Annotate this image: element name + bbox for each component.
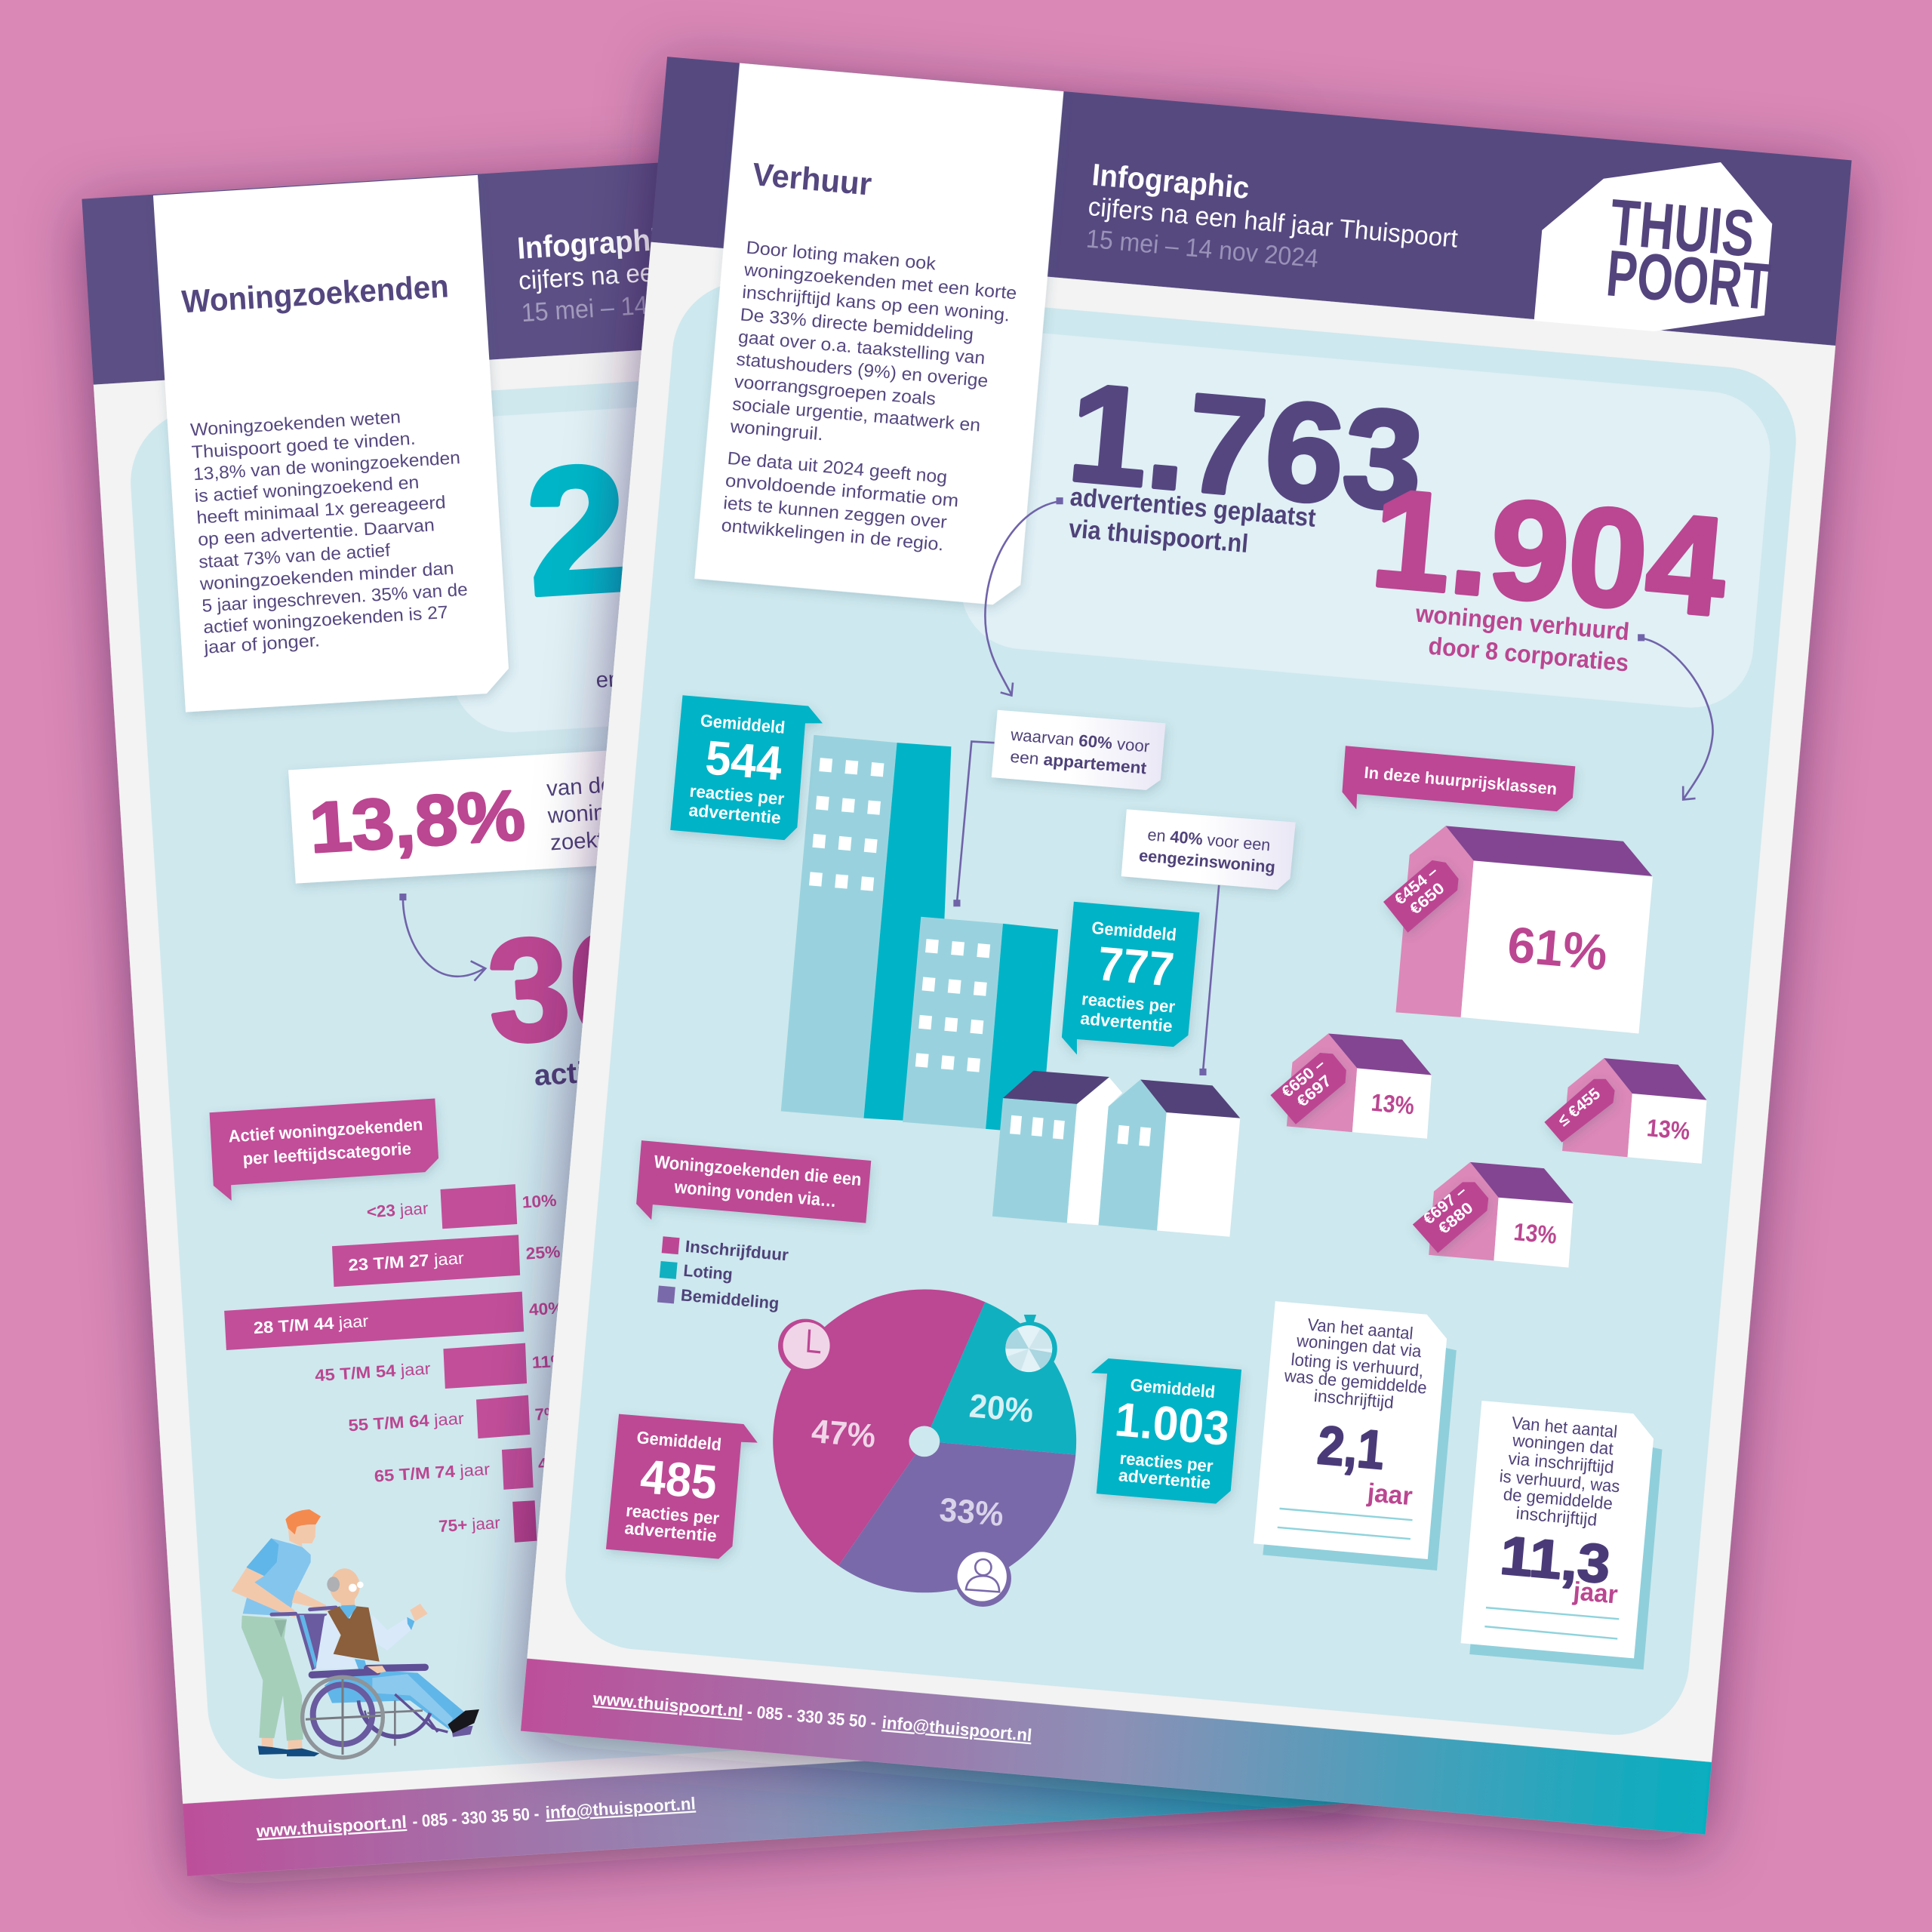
callout 1.003: Gemiddeld <box>1130 1375 1216 1401</box>
text block Verhuur: sociale urgentie, maatwerk en <box>731 395 981 436</box>
header text: cijfers na een half jaar Thuispoort <box>1087 192 1460 254</box>
bar chart age categories: <23 jaar <box>366 1198 429 1221</box>
callout 485 <box>606 1414 758 1559</box>
bar chart age categories: 28 T/M 44 jaar <box>253 1312 369 1337</box>
document inschrijftijd: Van het aantal <box>1511 1413 1618 1441</box>
callout 485: Gemiddeld <box>636 1427 722 1454</box>
text block Verhuur: statushouders (9%) en overige <box>735 350 989 392</box>
panel: front page Verhuur <box>521 57 1852 1835</box>
arrow from advertenties to buildings <box>985 498 1062 696</box>
heading Verhuur: Verhuur <box>751 156 873 202</box>
ribbon huurprijsklassen: In deze huurprijsklassen <box>1364 763 1558 798</box>
back footer text: - 085 - 330 35 50 - <box>412 1804 540 1831</box>
back header text <box>516 221 890 328</box>
connector eengezinswoning <box>1201 885 1219 1075</box>
pie chart: 20% <box>968 1387 1035 1430</box>
back header text: 15 mei – 14 nov 2024 <box>521 285 755 328</box>
text block Verhuur: woningzoekenden met een korte <box>743 260 1017 303</box>
callout 485: reacties per <box>625 1500 720 1528</box>
text block Verhuur: ontwikkelingen in de regio. <box>721 516 944 555</box>
callout 777: reacties per <box>1081 989 1176 1017</box>
big number teal: 2 <box>521 426 633 633</box>
big number 1.763: 1.763 <box>1063 355 1429 540</box>
building medium <box>903 917 1058 1134</box>
text block Woningzoekenden: is actief woningzoekend en <box>194 473 420 506</box>
text block Woningzoekenden: 5 jaar ingeschreven. 35% van de <box>202 580 468 617</box>
text block Verhuur: iets te kunnen zeggen over <box>722 494 948 533</box>
document inschrijftijd: 11,3 <box>1498 1525 1613 1595</box>
callout 1.003: 1.003 <box>1112 1392 1232 1456</box>
back footer text <box>255 1793 696 1841</box>
footer text: info@thuispoort.nl <box>881 1712 1032 1745</box>
logo Thuispoort: THUIS <box>1607 186 1757 271</box>
house 61%: €650 <box>1407 879 1448 918</box>
bar chart age categories: 55 T/M 64 jaar <box>348 1409 465 1435</box>
header text <box>1085 157 1460 273</box>
callout 13,8%: woning <box>546 799 619 829</box>
document inschrijftijd: via inschrijftijd <box>1507 1448 1615 1477</box>
footer text: www.thuispoort.nl <box>592 1688 744 1721</box>
callout 777 <box>1062 902 1199 1055</box>
bar chart age categories: 4% <box>537 1454 563 1474</box>
building large <box>781 735 951 1122</box>
icon: timer <box>1003 1315 1057 1376</box>
house 13% bottom: €880 <box>1435 1199 1477 1238</box>
ribbon huurprijsklassen <box>1342 746 1575 811</box>
pie chart: 33% <box>938 1491 1005 1534</box>
bar chart age categories: 75+ jaar <box>438 1513 500 1536</box>
back footer text: info@thuispoort.nl <box>545 1793 696 1823</box>
callout 13,8%: van de <box>546 772 614 801</box>
callout 544: 544 <box>703 731 785 791</box>
text block Woningzoekenden: staat 73% van de actief <box>198 541 391 573</box>
back header text: Infographic <box>516 221 675 266</box>
label advertenties <box>1068 483 1317 558</box>
document loting: was de gemiddelde <box>1283 1365 1428 1398</box>
back footer text: www.thuispoort.nl <box>255 1812 408 1841</box>
text block Woningzoekenden <box>189 408 468 658</box>
ribbon woningzoekenden die een woning vonden <box>636 1140 871 1223</box>
house 13% left <box>1270 1033 1432 1139</box>
icon: clock <box>778 1319 832 1373</box>
legend <box>657 1236 789 1313</box>
legend: Loting <box>683 1261 734 1284</box>
back header text: cijfers na een half jaar Thuispoort <box>518 244 890 296</box>
house 13% right: 13% <box>1646 1113 1691 1145</box>
back page sheet <box>82 125 1374 1876</box>
document inschrijftijd: jaar <box>1571 1577 1619 1610</box>
label woningen verhuurd: door 8 corporaties <box>1427 632 1630 677</box>
callout 777: Gemiddeld <box>1091 918 1177 945</box>
pie chart <box>773 1289 1076 1592</box>
text block Verhuur: De data uit 2024 geeft nog <box>727 449 948 488</box>
callout 1.003: advertentie <box>1118 1465 1211 1493</box>
label advertenties: advertenties geplaatst <box>1069 483 1317 533</box>
header text: Infographic <box>1091 157 1251 205</box>
text: actief: actief <box>533 1055 613 1092</box>
logo Thuispoort: POORT <box>1604 237 1774 324</box>
bar chart age categories <box>224 1184 568 1543</box>
big number 1.904: 1.904 <box>1366 460 1732 646</box>
ribbon age categories <box>210 1099 438 1201</box>
arrow from woningen to houses <box>1638 635 1713 800</box>
document inschrijftijd: inschrijftijd <box>1515 1503 1598 1530</box>
panel: back page Woningzoekenden <box>82 125 1374 1876</box>
bar chart age categories: 23 T/M 27 jaar <box>348 1248 465 1275</box>
house 61%: 61% <box>1506 916 1610 981</box>
callout eengezinswoning <box>1121 809 1296 890</box>
ribbon age categories: per leeftijdscategorie <box>242 1138 412 1168</box>
callout eengezinswoning: en 40% voor een <box>1147 825 1271 854</box>
house 13% right: ≤ €455 <box>1555 1084 1604 1130</box>
heading Woningzoekenden: Woningzoekenden <box>180 268 450 319</box>
text block Verhuur: De 33% directe bemiddeling <box>740 305 974 345</box>
text block Verhuur: gaat over o.a. taakstelling van <box>737 328 986 368</box>
callout appartement: waarvan 60% voor <box>1009 725 1150 756</box>
callout 485: 485 <box>638 1450 719 1509</box>
bar chart age categories: 40% <box>528 1298 565 1319</box>
callout eengezinswoning: eengezinswoning <box>1138 846 1276 877</box>
house 13% left: €650 – <box>1278 1055 1328 1101</box>
text block Woningzoekenden: 13,8% van de woningzoekenden <box>192 448 461 485</box>
text block Verhuur: woningruil. <box>729 417 824 445</box>
legend: Inschrijfduur <box>685 1237 789 1265</box>
callout 485: advertentie <box>624 1518 718 1546</box>
house 61%: €454 – <box>1392 863 1441 909</box>
text block Verhuur: inschrijftijd kans op een woning. <box>741 283 1011 326</box>
text: en: en <box>595 666 621 693</box>
callout 13,8%: zoekt <box>549 827 604 856</box>
callout 13,8%: 13,8% <box>307 775 528 869</box>
text block Woningzoekenden: Thuispoort goed te vinden. <box>191 429 416 463</box>
house 13% bottom: €697 – <box>1420 1183 1470 1228</box>
arrow to 30 <box>401 894 485 981</box>
document inschrijftijd <box>1461 1401 1662 1669</box>
document loting <box>1254 1301 1457 1571</box>
document loting: 2,1 <box>1315 1415 1387 1481</box>
big number 30: 30 <box>484 901 655 1073</box>
callout appartement <box>992 710 1165 790</box>
legend: Bemiddeling <box>680 1285 780 1313</box>
label woningen verhuurd: woningen verhuurd <box>1414 599 1631 645</box>
bar chart age categories: 10% <box>521 1191 558 1212</box>
document loting: jaar <box>1365 1478 1414 1511</box>
document inschrijftijd: de gemiddelde <box>1503 1484 1614 1513</box>
white panel Woningzoekenden <box>153 175 509 712</box>
callout appartement: een appartement <box>1010 747 1148 777</box>
callout 13,8% <box>288 746 697 884</box>
connector appartement <box>955 742 995 906</box>
header text: 15 mei – 14 nov 2024 <box>1085 224 1319 273</box>
bar chart age categories: 65 T/M 74 jaar <box>374 1460 491 1486</box>
text block Woningzoekenden: heeft minimaal 1x gereageerd <box>196 493 446 528</box>
callout 544 <box>670 695 823 840</box>
house 61% <box>1383 826 1653 1033</box>
house 13% right <box>1544 1058 1707 1164</box>
callout 544: Gemiddeld <box>700 710 786 737</box>
ribbon woningzoekenden die een woning vonden: woning vonden via… <box>673 1177 837 1211</box>
houses eengezinswoning <box>992 1071 1240 1237</box>
text block Verhuur: voorrangsgroepen zoals <box>734 372 937 410</box>
ribbon age categories: Actief woningzoekenden <box>228 1114 423 1146</box>
house 13% bottom <box>1413 1162 1574 1268</box>
front page sheet <box>521 57 1852 1835</box>
document inschrijftijd: woningen dat <box>1511 1430 1614 1459</box>
footer text: - 085 - 330 35 50 - <box>746 1701 877 1732</box>
document inschrijftijd: is verhuurd, was <box>1499 1466 1621 1496</box>
bar chart age categories: 7% <box>534 1404 560 1424</box>
callout 777: advertentie <box>1079 1008 1174 1035</box>
document loting: woningen dat via <box>1295 1331 1423 1361</box>
house 13% bottom: 13% <box>1512 1217 1558 1249</box>
document loting: Van het aantal <box>1306 1315 1414 1343</box>
pie chart: 47% <box>810 1413 877 1455</box>
label woningen verhuurd <box>1414 599 1631 677</box>
callout 544: advertentie <box>688 800 782 827</box>
house 13% left: €697 <box>1294 1072 1335 1111</box>
text block Woningzoekenden: Woningzoekenden weten <box>189 408 401 441</box>
document loting: loting is verhuurd, <box>1291 1349 1425 1380</box>
label advertenties: via thuispoort.nl <box>1068 514 1249 558</box>
logo Thuispoort <box>1534 162 1774 331</box>
house 13% left: 13% <box>1370 1088 1416 1119</box>
icon: person <box>955 1550 1011 1607</box>
bar chart age categories: 25% <box>525 1242 561 1263</box>
text block Woningzoekenden: jaar of jonger. <box>203 631 321 658</box>
bar chart age categories: 45 T/M 54 jaar <box>315 1359 431 1385</box>
text block Verhuur: Door loting maken ook <box>746 238 937 274</box>
text block Verhuur: onvoldoende informatie om <box>724 471 959 511</box>
callout 1.003: reacties per <box>1119 1448 1214 1475</box>
bar chart age categories: 11% <box>531 1351 568 1372</box>
document loting: inschrijftijd <box>1313 1386 1395 1412</box>
callout 544: reacties per <box>689 781 785 808</box>
text block Woningzoekenden: woningzoekenden minder dan <box>198 559 454 595</box>
white panel Verhuur <box>694 63 1063 607</box>
callout 777: 777 <box>1096 937 1177 997</box>
text block Woningzoekenden: op een advertentie. Daarvan <box>197 515 435 550</box>
illustration: carer pushing wheelchair <box>232 1509 479 1758</box>
footer text <box>592 1688 1032 1745</box>
text block Woningzoekenden: actief woningzoekenden is 27 <box>203 603 449 638</box>
callout 1.003 <box>1091 1358 1241 1503</box>
ribbon woningzoekenden die een woning vonden: Woningzoekenden die een <box>653 1152 863 1190</box>
text block Verhuur <box>721 238 1017 555</box>
